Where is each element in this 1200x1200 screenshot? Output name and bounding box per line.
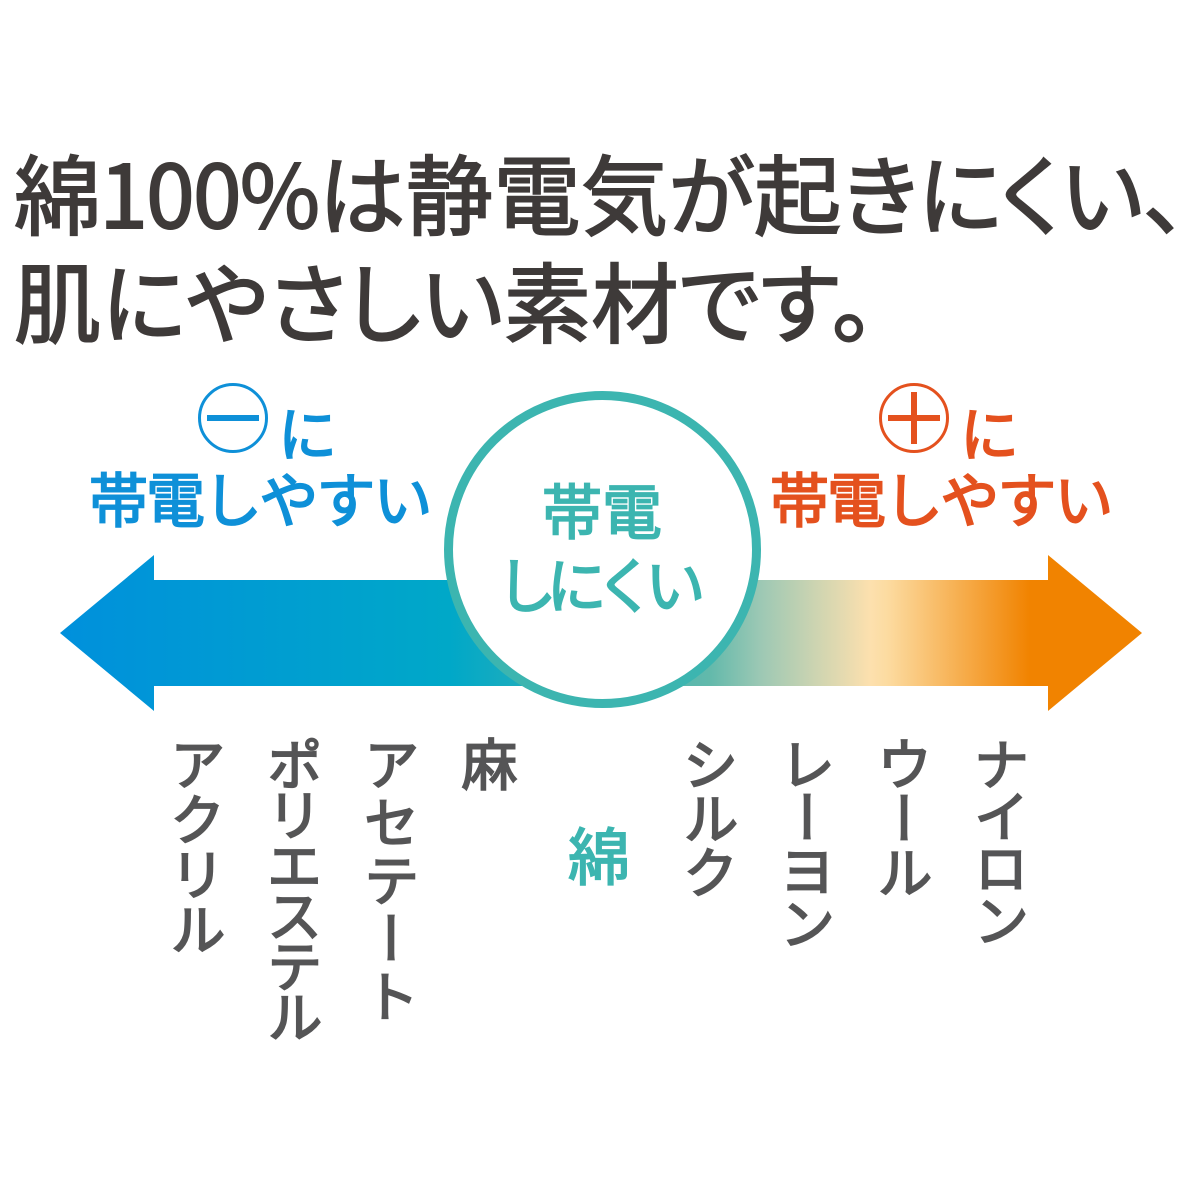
center label [497,480,702,621]
material: nylon: ナイロン [966,736,1029,944]
negative heading [89,383,430,535]
center label: しにくい [497,554,695,621]
negative text: に [278,403,337,469]
material: hemp: 麻 [454,736,517,792]
title [14,128,1188,362]
material: acrylic: アクリル [162,736,225,956]
material: rayon: レーヨン [772,736,835,948]
center circle: low static [444,391,761,708]
positive heading [770,383,1111,535]
center label: 帯電 [542,480,662,547]
icon: plus circle [879,383,949,453]
positive text: に [960,403,1019,469]
material: cotton: 綿 [558,825,627,887]
negative text [89,403,430,535]
material: polyester: ポリエステル [259,736,322,1039]
icon: minus circle [198,383,268,453]
negative text: 帯電しやすい [89,469,430,535]
positive text: 帯電しやすい [770,469,1111,535]
title: 綿100%は静電気が起きにくい、 [14,128,1188,254]
title: 肌にやさしい素材です。 [14,236,875,362]
material: wool: ウール [869,736,932,898]
material: silk: シルク [675,736,738,898]
material: acetate: アセテート [356,736,419,1026]
positive text [770,403,1111,535]
